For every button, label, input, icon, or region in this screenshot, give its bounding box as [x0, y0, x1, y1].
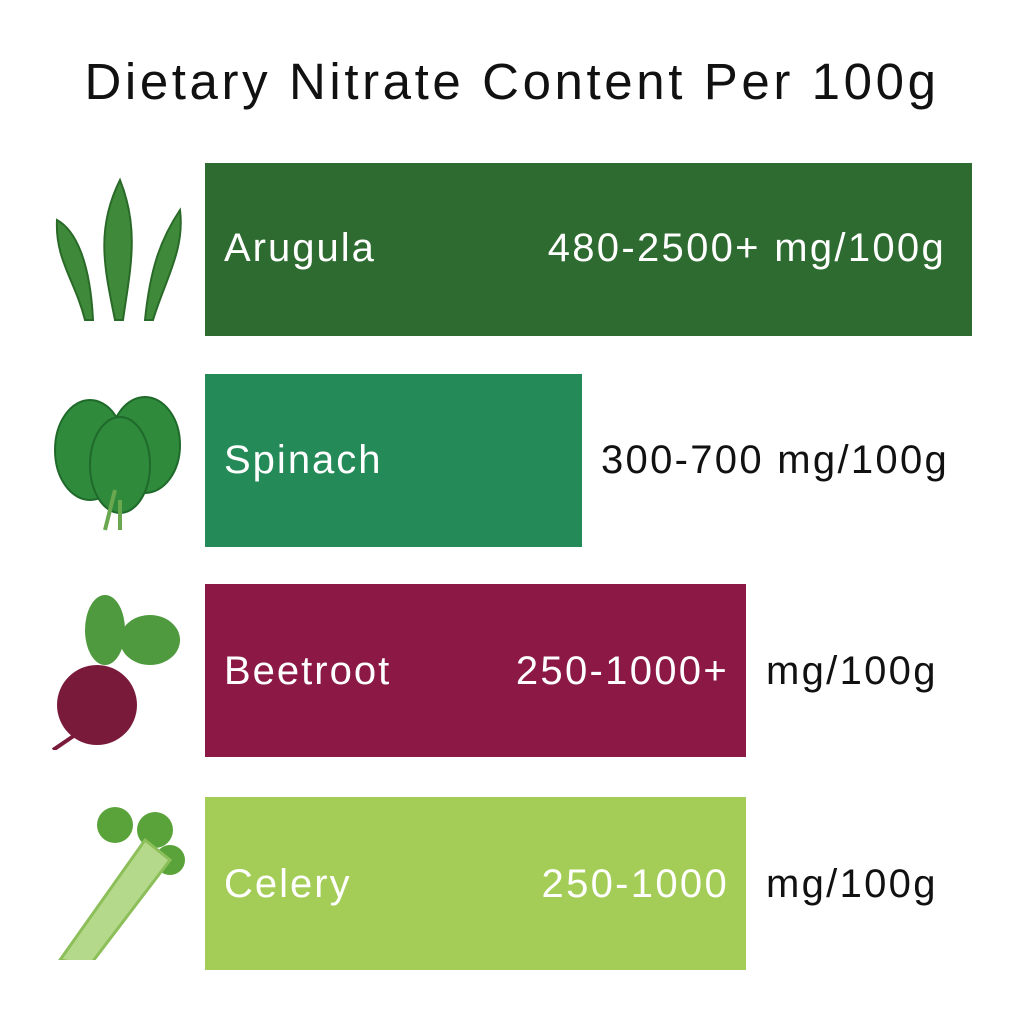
bar: celery — [205, 797, 746, 970]
bar: beetroot — [205, 584, 746, 757]
label: beetroot: Beetroot — [224, 649, 391, 693]
icon: arugula — [56, 178, 182, 321]
icon: celery — [58, 807, 185, 960]
value: arugula: 480-2500+ mg/100g — [548, 226, 946, 270]
unit: celery: mg/100g — [766, 862, 938, 906]
value: celery: 250-1000 — [542, 862, 729, 906]
unit: beetroot: mg/100g — [766, 649, 938, 693]
label: spinach: Spinach — [224, 438, 383, 482]
value: spinach: 300-700 mg/100g — [601, 438, 949, 482]
label: celery: Celery — [224, 862, 352, 906]
value: beetroot: 250-1000+ — [516, 649, 729, 693]
icon: spinach — [54, 396, 181, 530]
label: arugula: Arugula — [224, 226, 376, 270]
bar: arugula — [205, 163, 972, 336]
icon: beetroot — [52, 595, 180, 750]
title: Dietary Nitrate Content Per 100g — [84, 53, 940, 110]
bar: spinach — [205, 374, 582, 547]
